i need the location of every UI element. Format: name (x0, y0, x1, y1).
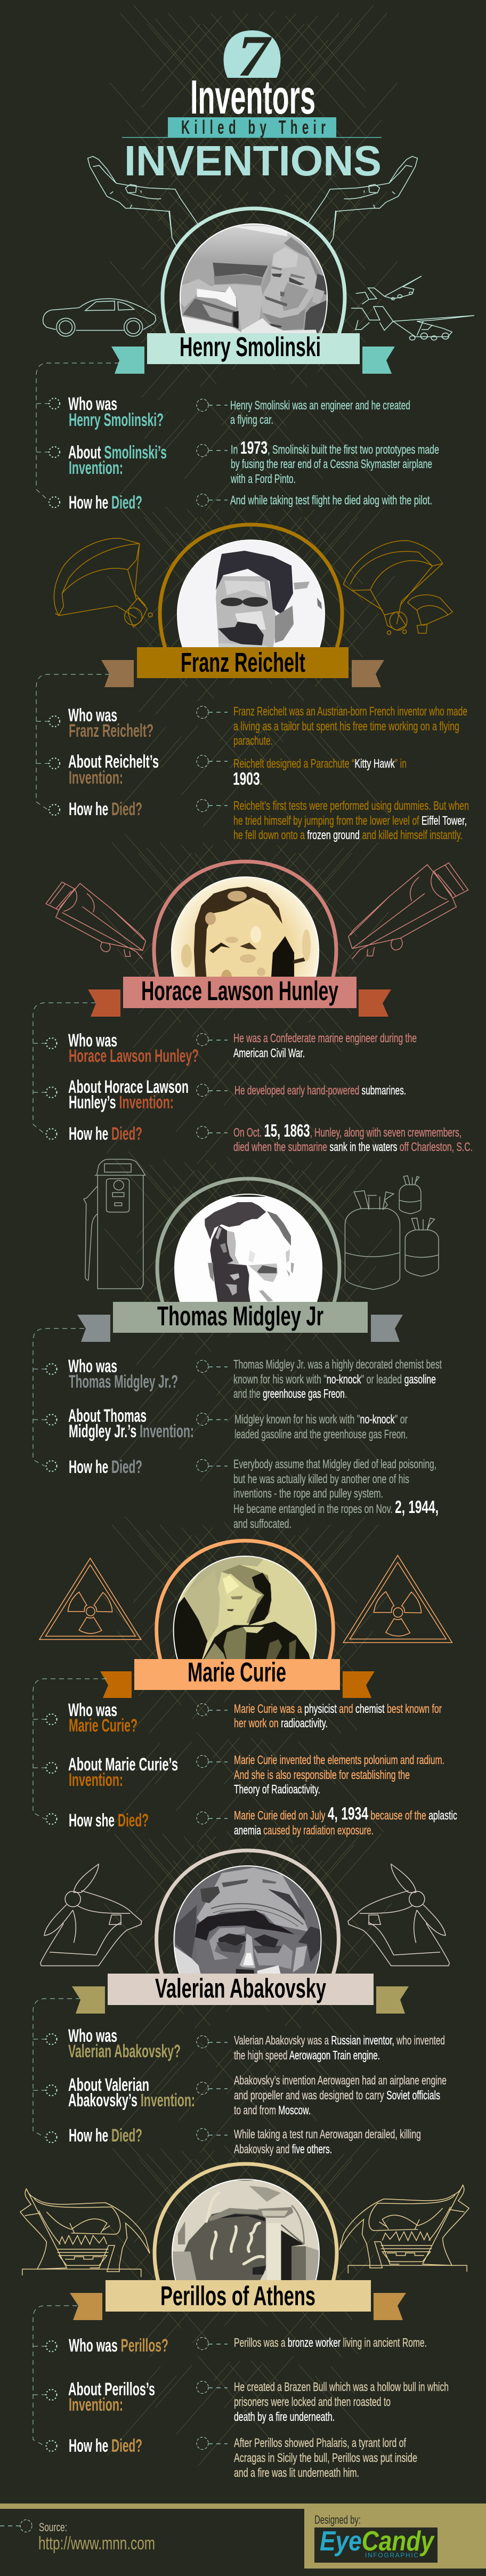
footer (0, 2503, 486, 2569)
questions: Horace Lawson Hunley: About Horace Lawson (68, 1077, 189, 1097)
title (122, 23, 382, 184)
ribbon banner: Perillos of Athens: Perillos of Athens (160, 2281, 315, 2311)
questions: Horace Lawson Hunley: How he Died? (69, 1124, 142, 1144)
questions: Horace Lawson Hunley: Hunley’s Invention: (69, 1092, 174, 1113)
answers: Valerian Abakovsky: the high speed Aerowagon Train engine. (234, 2048, 380, 2062)
icon: left hand (88, 156, 198, 247)
answers: Valerian Abakovsky: Abakovsky and five others. (234, 2142, 332, 2156)
answers: Valerian Abakovsky (197, 2033, 447, 2156)
answers: Perillos of Athens: and a fire was lit underneath him. (234, 2466, 359, 2480)
portrait: Perillos of Athens (155, 2164, 337, 2296)
source: http://www.mnn.com (38, 2533, 155, 2554)
answers: Horace Lawson Hunley: He developed early hand-powered submarines. (234, 1083, 406, 1097)
icon: brazen bull right (339, 2185, 469, 2273)
questions: Henry Smolinski: Henry Smolinski? (69, 410, 164, 430)
questions: Valerian Abakovsky: About Valerian (68, 2075, 149, 2095)
questions: Marie Curie: Who was (68, 1700, 117, 1720)
portrait: Thomas Midgley Jr (157, 1179, 339, 1310)
source (0, 2519, 155, 2554)
icon: radiation triangle left (39, 1558, 141, 1639)
panel: Franz Reichelt (36, 525, 469, 842)
questions: Henry Smolinski: About Smolinski’s (68, 442, 167, 463)
icon: parachutes right (344, 541, 452, 634)
questions: Henry Smolinski (49, 394, 167, 513)
questions: Marie Curie: About Marie Curie’s (68, 1754, 178, 1775)
connector (33, 2306, 77, 2446)
questions: Franz Reichelt: Franz Reichelt? (69, 721, 153, 741)
designer credit and logo: Designed by: (314, 2513, 361, 2526)
ribbon banner: Henry Smolinski (111, 332, 395, 374)
icon: number seven dome: 7 (237, 23, 272, 88)
ribbon banner: Thomas Midgley Jr (77, 1301, 403, 1342)
questions: Thomas Midgley Jr: How he Died? (69, 1457, 142, 1477)
answers: Marie Curie: anemia caused by radiation exposure. (234, 1823, 374, 1837)
questions: Marie Curie (46, 1700, 178, 1831)
questions: Perillos of Athens: Invention: (69, 2395, 123, 2415)
answers: Marie Curie: Theory of Radioactivity. (234, 1782, 320, 1796)
footer band (0, 2503, 486, 2569)
icon: number seven dome (224, 23, 280, 88)
connector (33, 1003, 96, 1134)
answers: Marie Curie: her work on radioactivity. (234, 1716, 328, 1730)
questions: Henry Smolinski: Invention: (69, 458, 123, 478)
answers: Marie Curie: Marie Curie died on July 4, 1934 because of the aplastic (234, 1804, 457, 1823)
questions: Perillos of Athens: How he Died? (69, 2436, 142, 2456)
answers: Valerian Abakovsky: and propeller and was designed to carry Soviet officials (234, 2088, 440, 2102)
answers: Horace Lawson Hunley (197, 1031, 473, 1154)
ribbon banner: Valerian Abakovsky: Valerian Abakovsky (155, 1973, 326, 2003)
icon: right hand (307, 156, 417, 247)
answers: Henry Smolinski (197, 398, 439, 507)
connector (33, 1679, 107, 1819)
answers: Marie Curie: Marie Curie was a physicist and chemist best known for (234, 1702, 442, 1716)
questions: Thomas Midgley Jr (46, 1356, 194, 1477)
icon: aerowagon propeller right (348, 1864, 449, 1966)
questions: Franz Reichelt: How he Died? (69, 799, 142, 819)
answers: Perillos of Athens: After Perillos showed Phalaris, a tyrant lord of (234, 2436, 406, 2450)
answers: Henry Smolinski: a flying car. (230, 413, 273, 426)
connector (36, 674, 110, 810)
icon: submarine left (46, 882, 145, 959)
portrait: Valerian Abakovsky (157, 1850, 339, 1982)
ribbon banner: Perillos of Athens (70, 2280, 406, 2320)
answers: Franz Reichelt: 1903. (233, 769, 262, 788)
answers: Thomas Midgley Jr: and suffocated. (233, 1517, 291, 1531)
portrait: Franz Reichelt (160, 525, 342, 656)
questions: Marie Curie: Invention: (69, 1770, 123, 1790)
answers: Perillos of Athens: prisoners were locked and then roasted to (234, 2395, 391, 2409)
icon: parachute left (54, 538, 152, 627)
questions: Horace Lawson Hunley: Horace Lawson Hunley? (69, 1046, 199, 1066)
questions: Thomas Midgley Jr: Who was (68, 1356, 117, 1376)
icon: car (43, 299, 156, 336)
questions: Perillos of Athens: Who was Perillos? (69, 2336, 168, 2356)
designer credit and logo: INFOGRAPHIC (365, 2551, 418, 2559)
icon: radiation triangle right (343, 1555, 452, 1643)
connector (36, 363, 119, 500)
icon: brazen bull left (20, 2189, 150, 2277)
answers: Thomas Midgley Jr: inventions - the rope and pulley system. (233, 1486, 383, 1500)
heading: Killed by Their (122, 117, 382, 138)
answers: Valerian Abakovsky: to and from Moscow. (234, 2103, 311, 2117)
answers: Franz Reichelt (197, 704, 469, 842)
ribbon banner: Marie Curie (100, 1657, 375, 1698)
questions: Thomas Midgley Jr: Thomas Midgley Jr.? (69, 1372, 178, 1392)
heading: INVENTIONS: INVENTIONS (124, 137, 382, 184)
answers: Thomas Midgley Jr: known for his work with "no-knock" or leaded gasoline (233, 1372, 436, 1386)
designer credit and logo (314, 2513, 438, 2563)
panel: Marie Curie (33, 1541, 457, 1837)
icon: flying car planes (351, 276, 474, 340)
portrait: Horace Lawson Hunley (152, 859, 338, 977)
connector (33, 1999, 80, 2137)
questions: Thomas Midgley Jr: Midgley Jr.’s Invention: (69, 1421, 194, 1442)
icon: submarine right (349, 863, 468, 959)
answers: Thomas Midgley Jr (197, 1357, 442, 1531)
questions: Valerian Abakovsky: How he Died? (69, 2126, 142, 2146)
panel: Thomas Midgley Jr (33, 1160, 442, 1531)
questions: Franz Reichelt: Who was (68, 705, 117, 726)
answers: Marie Curie (197, 1702, 457, 1837)
answers: Perillos of Athens: Perillos was a bronze worker living in ancient Rome. (234, 2336, 427, 2349)
questions: Franz Reichelt: About Reichelt’s (68, 752, 159, 772)
answers: Marie Curie: And she is also responsible for establishing the (234, 1768, 410, 1782)
answers: Thomas Midgley Jr: but he was actually killed by another one of his (233, 1472, 409, 1486)
answers: Valerian Abakovsky: Valerian Abakovsky was a Russian inventor, who invented (234, 2033, 445, 2047)
questions: Valerian Abakovsky: Who was (68, 2026, 117, 2046)
questions: Franz Reichelt: Invention: (69, 768, 123, 788)
panel: Henry Smolinski (36, 208, 474, 513)
answers: Perillos of Athens: death by a fire underneath. (234, 2410, 335, 2424)
ribbon banner: Franz Reichelt: Franz Reichelt (181, 647, 305, 678)
connector (33, 1329, 84, 1466)
questions: Henry Smolinski: Who was (68, 394, 117, 414)
questions: Marie Curie: How she Died? (69, 1810, 149, 1831)
questions: Valerian Abakovsky (46, 2026, 195, 2146)
questions: Marie Curie: Marie Curie? (69, 1716, 137, 1736)
questions: Horace Lawson Hunley (46, 1031, 199, 1144)
icon: freon tanks (345, 1176, 439, 1290)
answers: Horace Lawson Hunley: American Civil War. (233, 1046, 305, 1060)
questions: Horace Lawson Hunley: Who was (68, 1031, 117, 1051)
portrait: Henry Smolinski (163, 208, 345, 340)
heading: Killed by Their: Killed by Their (181, 117, 326, 138)
questions: Perillos of Athens: About Perillos’s (68, 2379, 155, 2400)
answers: Henry Smolinski: with a Ford Pinto. (230, 472, 296, 486)
ribbon banner: Thomas Midgley Jr: Thomas Midgley Jr (157, 1301, 323, 1331)
ribbon banner: Henry Smolinski: Henry Smolinski (180, 332, 321, 362)
ribbon banner: Franz Reichelt (101, 647, 384, 687)
questions: Thomas Midgley Jr: About Thomas (68, 1406, 147, 1426)
source: Source: (39, 2521, 67, 2534)
answers: Thomas Midgley Jr: He became entangled in the ropes on Nov. 2, 1944, (233, 1497, 439, 1517)
heading: Inventors: Inventors (190, 71, 315, 124)
ribbon banner: Horace Lawson Hunley (88, 976, 391, 1017)
icon: gasoline pump (84, 1160, 145, 1289)
ribbon banner: Horace Lawson Hunley: Horace Lawson Hunley (141, 976, 338, 1006)
questions: Perillos of Athens (46, 2336, 168, 2456)
questions: Franz Reichelt (49, 705, 159, 819)
ribbon banner: Marie Curie: Marie Curie (188, 1657, 286, 1687)
icon: aerowagon propeller left (40, 1864, 142, 1966)
answers: Thomas Midgley Jr: Midgley known for his work with "no-knock" or (234, 1412, 408, 1426)
panel: Valerian Abakovsky (33, 1850, 449, 2156)
portrait: Marie Curie (157, 1541, 333, 1672)
questions: Valerian Abakovsky: Valerian Abakovsky? (68, 2041, 181, 2062)
panel: Perillos of Athens (20, 2164, 469, 2480)
questions: Valerian Abakovsky: Abakovsky’s Invention: (68, 2090, 195, 2111)
questions: Henry Smolinski: How he Died? (69, 493, 142, 513)
ribbon banner: Valerian Abakovsky (72, 1973, 409, 2014)
panel: Horace Lawson Hunley (33, 862, 473, 1154)
designer credit and logo: EyeCandy (320, 2526, 435, 2557)
answers: Franz Reichelt: parachute. (233, 734, 273, 747)
answers: Thomas Midgley Jr: and the greenhouse gas Freon. (233, 1387, 347, 1400)
answers: Franz Reichelt: Reichelt designed a Parachute “Kitty Hawk” in (233, 756, 407, 770)
answers: Perillos of Athens (197, 2336, 449, 2480)
